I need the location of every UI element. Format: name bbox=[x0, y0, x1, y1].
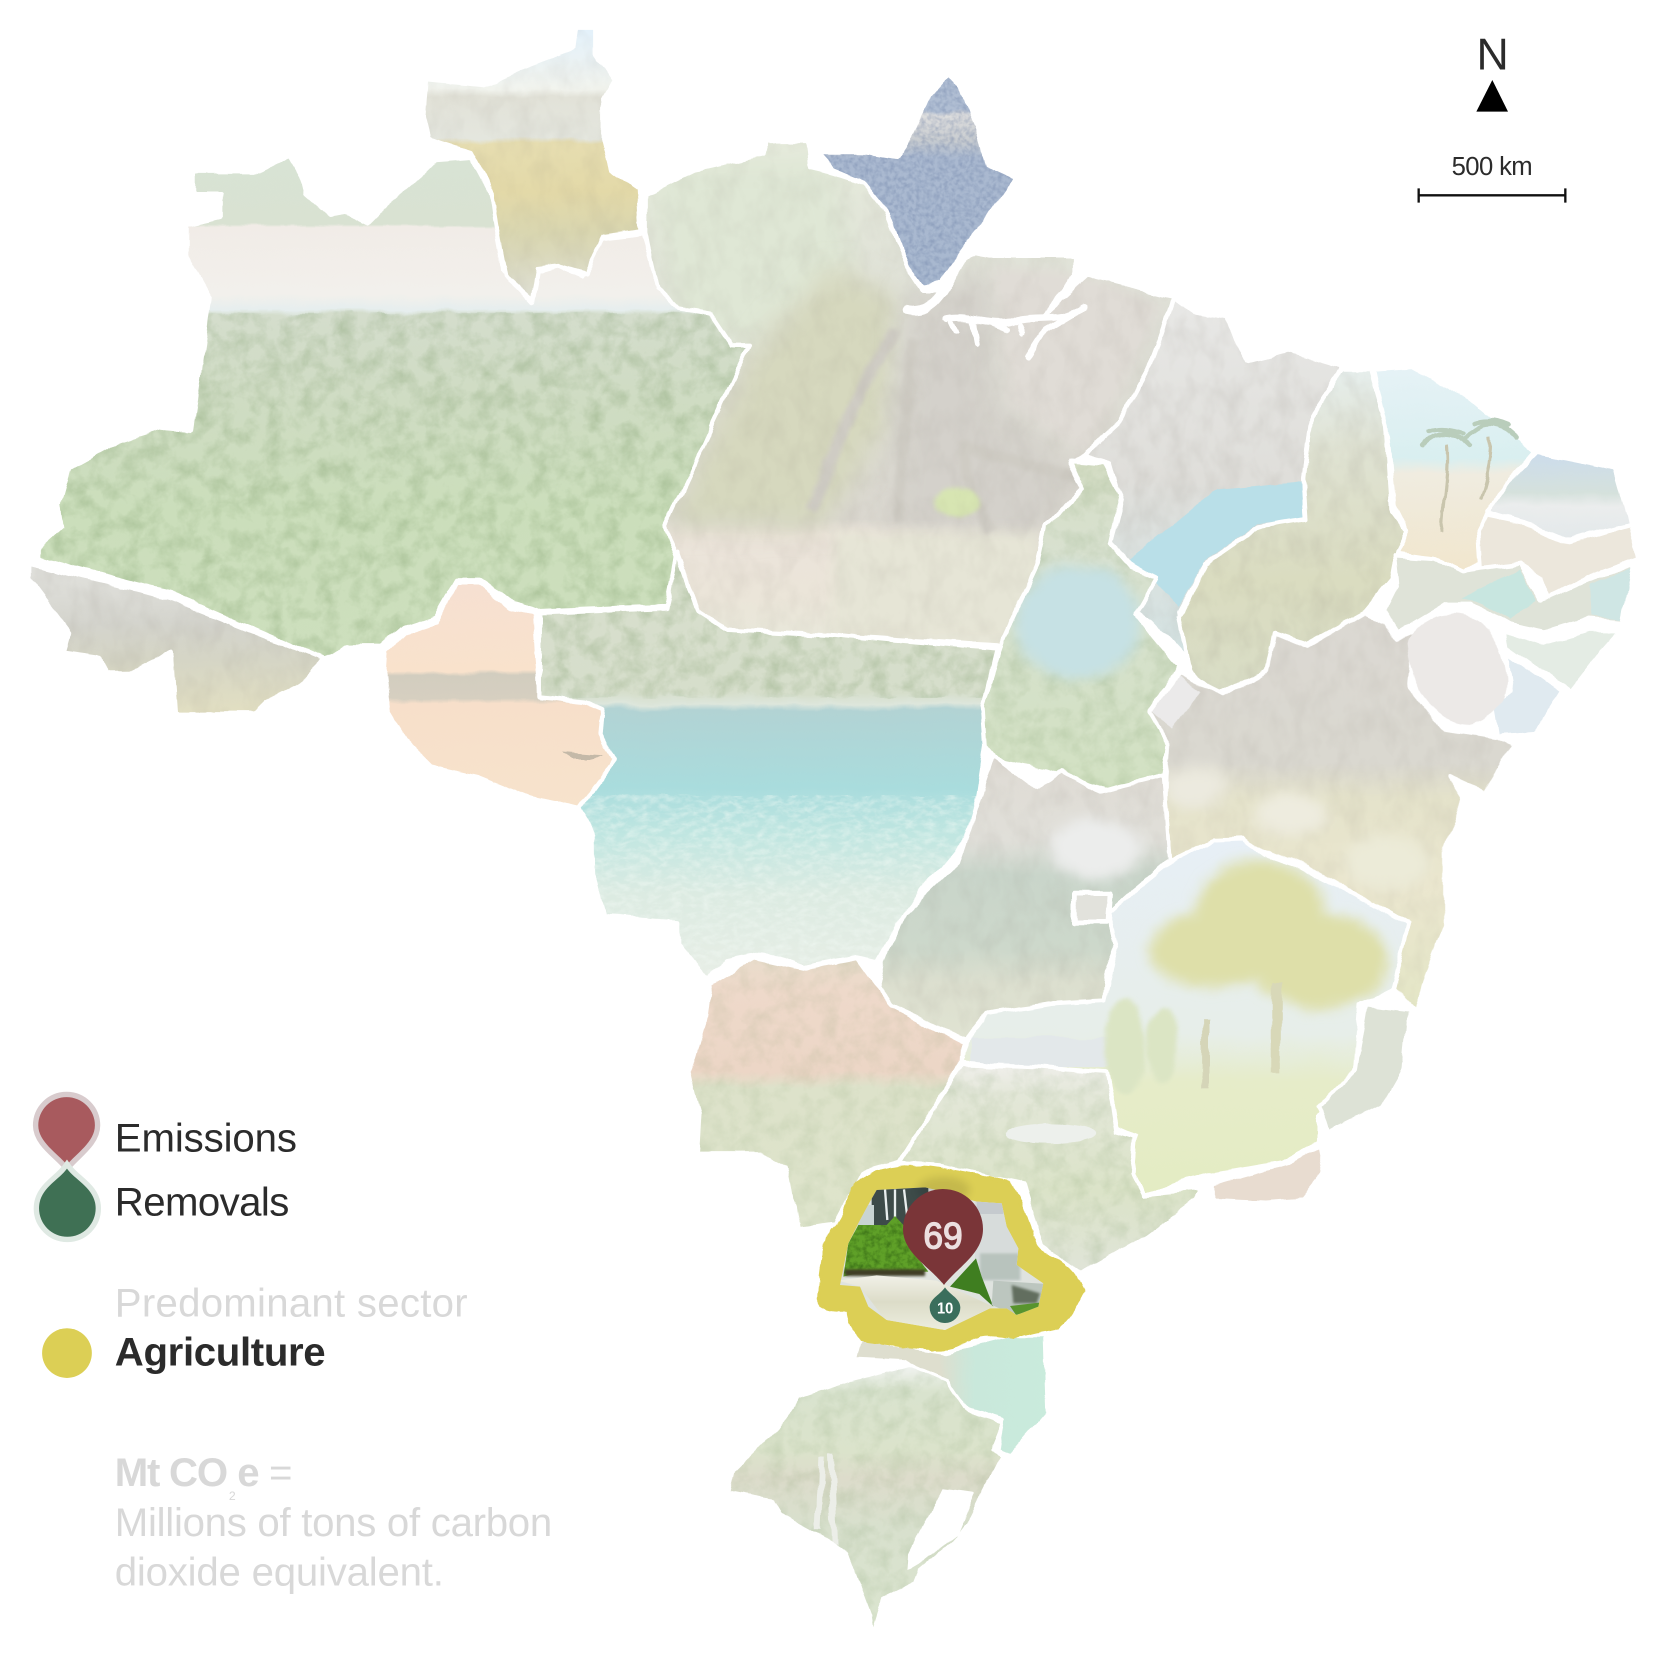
label: Predominant sector: Predominant sector bbox=[115, 1281, 468, 1326]
region: Distrito Federal bbox=[1073, 894, 1110, 922]
pin: emissions 69: 69 bbox=[923, 1214, 963, 1256]
cloud blob in Bahia bbox=[1407, 613, 1506, 723]
scale bar bbox=[1419, 188, 1565, 203]
note: Mt CO2e definition: e bbox=[237, 1450, 260, 1495]
note: Mt CO2e definition bbox=[115, 1450, 552, 1595]
region: Paraiba bbox=[1479, 516, 1639, 598]
icon: north arrow bbox=[1476, 80, 1508, 112]
pin: emissions 69 bbox=[903, 1189, 983, 1285]
legend: emissions, removals, sector and unit note bbox=[38, 1097, 552, 1595]
region: Mato Grosso bbox=[532, 553, 1000, 982]
region: Minas Gerais bbox=[963, 838, 1409, 1195]
region: Piaui bbox=[1179, 370, 1407, 694]
region: Amapa bbox=[816, 72, 1017, 287]
note: Mt CO2e definition: = bbox=[269, 1450, 292, 1495]
region: Tocantins bbox=[982, 460, 1179, 793]
region: Rondonia bbox=[384, 582, 614, 808]
pin: removals 10 bbox=[930, 1287, 960, 1323]
region: Ceara bbox=[1373, 367, 1535, 572]
icon: agriculture circle bbox=[42, 1328, 92, 1378]
region: Santa Catarina bbox=[856, 1336, 1048, 1455]
region: Rio Grande do Norte bbox=[1487, 452, 1631, 540]
region: Acre bbox=[29, 564, 324, 713]
pin shadow bbox=[917, 1177, 970, 1203]
lagoon: Lagoa dos Patos bbox=[908, 1487, 976, 1570]
region: Espirito Santo bbox=[1319, 1005, 1409, 1132]
region: Parana highlighted with agriculture outline, photo and pins bbox=[819, 1167, 1083, 1349]
label: Emissions: Emissions bbox=[115, 1115, 297, 1160]
region: Alagoas bbox=[1503, 630, 1620, 691]
photo: Iguazu falls in Parana shape bbox=[837, 1185, 1047, 1333]
region: Para bbox=[645, 141, 1173, 646]
region: Pernambuco bbox=[1384, 556, 1634, 633]
region: Roraima bbox=[423, 29, 641, 301]
note: Mt CO2e definition: Millions of tons of carbon bbox=[115, 1500, 552, 1545]
label: Agriculture: Agriculture bbox=[115, 1330, 326, 1375]
region: Maranhao bbox=[1083, 298, 1344, 660]
region: Mato Grosso do Sul bbox=[689, 958, 964, 1229]
compass and scale bar bbox=[1419, 30, 1565, 203]
region: Rio Grande do Sul bbox=[729, 1365, 1003, 1634]
pin: removals 10: 10 bbox=[937, 1300, 953, 1317]
icon: removals drop bbox=[39, 1169, 96, 1237]
region: Rio de Janeiro bbox=[1213, 1147, 1324, 1203]
note: Mt CO2e definition: 2 bbox=[229, 1489, 236, 1503]
region: Goias bbox=[878, 755, 1170, 1040]
note: Mt CO2e definition: dioxide equivalent. bbox=[115, 1550, 444, 1595]
label: Removals: Removals bbox=[115, 1179, 289, 1224]
region: Amazonas bbox=[37, 157, 750, 660]
label: north: N bbox=[1477, 30, 1509, 79]
outline: agriculture yellow border bbox=[819, 1167, 1083, 1349]
islands: Marajo white estuary lines bbox=[907, 238, 1084, 356]
icon: emissions drop bbox=[38, 1097, 95, 1165]
region: Bahia bbox=[1149, 612, 1514, 1011]
region: Sergipe bbox=[1493, 652, 1562, 737]
note: Mt CO2e definition: Mt CO bbox=[115, 1450, 228, 1495]
label: scale distance: 500 km bbox=[1452, 153, 1533, 181]
region: Sao Paulo bbox=[899, 1064, 1202, 1274]
